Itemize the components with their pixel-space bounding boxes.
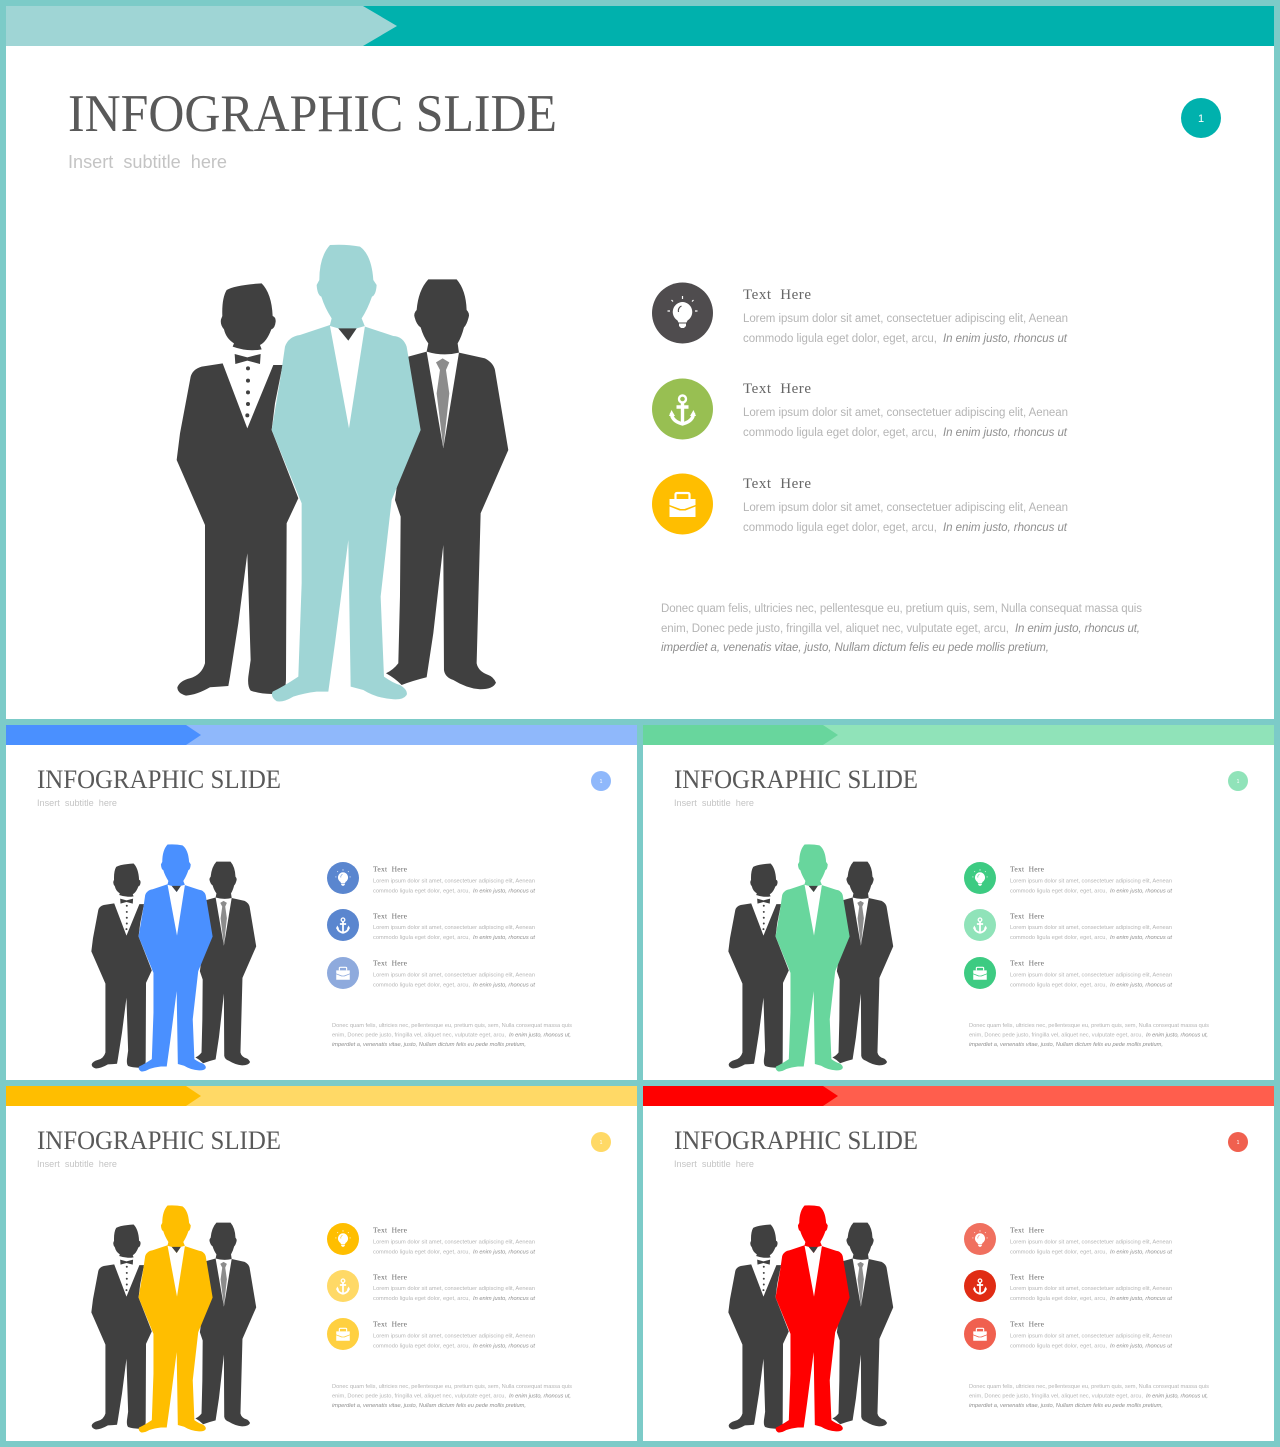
subtitle: Insert subtitle here bbox=[674, 798, 754, 808]
text block: item 3 bbox=[743, 476, 1068, 534]
page number badge: 1 bbox=[1237, 1140, 1240, 1146]
text block: item 2: Text Here bbox=[1010, 912, 1045, 920]
icon: anchor bbox=[964, 909, 996, 941]
text block: item 1: Text Here bbox=[1010, 1226, 1045, 1234]
page number badge: 1 bbox=[600, 779, 603, 785]
text block: item 3: In enim justo, rhoncus ut bbox=[473, 982, 535, 988]
illustration: three businessmen bbox=[728, 844, 893, 1071]
subtitle: Insert subtitle here bbox=[68, 152, 227, 172]
icon: light bulb bbox=[964, 862, 996, 894]
text block: item 1: In enim justo, rhoncus ut bbox=[1110, 1250, 1172, 1256]
text block: item 1: Lorem ipsum dolor sit amet, consectetuer adipiscing elit, Aenean bbox=[743, 313, 1068, 325]
text block: summary paragraph: imperdiet a, venenatis vitae, justo, Nullam dictum felis eu pede mollis pretium, bbox=[969, 1042, 1163, 1048]
header bar bbox=[6, 6, 1274, 46]
text block: item 1 bbox=[1010, 864, 1172, 894]
text block: summary paragraph bbox=[332, 1384, 572, 1409]
text block: item 1 bbox=[373, 864, 535, 894]
text block: item 1 bbox=[743, 287, 1068, 345]
text block: item 3: In enim justo, rhoncus ut bbox=[1110, 982, 1172, 988]
text block: item 2: Lorem ipsum dolor sit amet, consectetuer adipiscing elit, Aenean bbox=[373, 1286, 535, 1292]
text block: item 2: commodo ligula eget dolor, eget, arcu, bbox=[373, 1296, 470, 1302]
header bar bbox=[6, 725, 637, 745]
header arrow bbox=[6, 6, 397, 46]
icon: light bulb bbox=[964, 1223, 996, 1255]
title: INFOGRAPHIC SLIDE bbox=[674, 764, 918, 794]
panel: red slide bbox=[643, 1086, 1274, 1441]
text block: summary paragraph bbox=[332, 1023, 572, 1048]
page number badge bbox=[591, 1132, 611, 1152]
text block: item 3 bbox=[1010, 1320, 1172, 1350]
page number badge: 1 bbox=[1237, 779, 1240, 785]
page number badge bbox=[1181, 98, 1221, 138]
text block: item 3: Text Here bbox=[373, 958, 408, 968]
text block: item 1: Text Here bbox=[743, 287, 811, 303]
illustration: three businessmen bbox=[91, 1205, 256, 1432]
panel: green slide bbox=[643, 725, 1274, 1080]
header bar bbox=[643, 1086, 1274, 1106]
text block: item 3: Lorem ipsum dolor sit amet, consectetuer adipiscing elit, Aenean bbox=[373, 1334, 535, 1340]
illustration: three businessmen bbox=[728, 1205, 893, 1432]
text block: item 3: Text Here bbox=[373, 1320, 408, 1328]
header arrow bbox=[6, 725, 201, 745]
page number badge bbox=[591, 771, 611, 791]
title: INFOGRAPHIC SLIDE bbox=[674, 1125, 918, 1155]
text block: item 3: commodo ligula eget dolor, eget, arcu, bbox=[743, 522, 937, 534]
page number badge: 1 bbox=[600, 1140, 603, 1146]
text block: item 3: In enim justo, rhoncus ut bbox=[473, 1344, 535, 1350]
text block: summary paragraph: imperdiet a, venenatis vitae, justo, Nullam dictum felis eu pede mollis pretium, bbox=[332, 1042, 526, 1048]
title: INFOGRAPHIC SLIDE bbox=[68, 85, 557, 143]
text block: item 1 bbox=[1010, 1226, 1172, 1256]
text block: item 2: In enim justo, rhoncus ut bbox=[943, 427, 1068, 439]
text block: item 2: Lorem ipsum dolor sit amet, consectetuer adipiscing elit, Aenean bbox=[373, 925, 535, 931]
subtitle: Insert subtitle here bbox=[674, 1159, 754, 1169]
text block: item 1: Lorem ipsum dolor sit amet, consectetuer adipiscing elit, Aenean bbox=[373, 1240, 535, 1246]
text block: item 2: commodo ligula eget dolor, eget, arcu, bbox=[743, 427, 937, 439]
subtitle: Insert subtitle here bbox=[37, 1159, 117, 1169]
text block: item 2: Text Here bbox=[1010, 1272, 1045, 1282]
text block: item 3 bbox=[373, 1320, 535, 1350]
text block: item 3 bbox=[373, 958, 535, 988]
text block: summary paragraph: Donec quam felis, ultricies nec, pellentesque eu, pretium quis, sem, Nulla consequat massa quis bbox=[332, 1023, 572, 1029]
text block: item 3: Lorem ipsum dolor sit amet, consectetuer adipiscing elit, Aenean bbox=[1010, 972, 1172, 978]
text block: summary paragraph: In enim justo, rhoncus ut, bbox=[509, 1032, 571, 1038]
text block: summary paragraph: Donec quam felis, ultricies nec, pellentesque eu, pretium quis, sem, Nulla consequat massa quis bbox=[969, 1023, 1209, 1029]
icon: briefcase bbox=[964, 957, 996, 989]
text block: summary paragraph: In enim justo, rhoncus ut, bbox=[1146, 1394, 1208, 1400]
text block: item 1: In enim justo, rhoncus ut bbox=[473, 888, 535, 894]
text block: item 3: Lorem ipsum dolor sit amet, consectetuer adipiscing elit, Aenean bbox=[743, 502, 1068, 514]
text block: summary paragraph: In enim justo, rhoncus ut, bbox=[1146, 1032, 1208, 1038]
icon: briefcase bbox=[327, 1318, 359, 1350]
title: INFOGRAPHIC SLIDE bbox=[37, 764, 281, 794]
page number badge bbox=[1228, 771, 1248, 791]
text block: item 3: Lorem ipsum dolor sit amet, consectetuer adipiscing elit, Aenean bbox=[373, 972, 535, 978]
text block: item 1: Text Here bbox=[373, 1226, 408, 1234]
icon: anchor bbox=[964, 1270, 996, 1302]
icon: anchor bbox=[327, 909, 359, 941]
text block: summary paragraph: In enim justo, rhoncus ut, bbox=[1015, 623, 1140, 635]
text block: item 3: Text Here bbox=[1010, 958, 1045, 968]
text block: item 2: commodo ligula eget dolor, eget, arcu, bbox=[1010, 1296, 1107, 1302]
text block: item 3: commodo ligula eget dolor, eget, arcu, bbox=[1010, 982, 1107, 988]
page number badge bbox=[1228, 1132, 1248, 1152]
text block: item 1: In enim justo, rhoncus ut bbox=[473, 1250, 535, 1256]
text block: item 1: In enim justo, rhoncus ut bbox=[943, 333, 1068, 345]
panel: yellow slide bbox=[6, 1086, 637, 1441]
text block: summary paragraph: In enim justo, rhoncus ut, bbox=[509, 1394, 571, 1400]
panel: main slide bbox=[6, 6, 1274, 719]
text block: item 2: In enim justo, rhoncus ut bbox=[1110, 935, 1172, 941]
text block: summary paragraph: enim, Donec pede justo, fringilla vel, aliquet nec, vulputate eget, arcu, bbox=[332, 1032, 506, 1038]
text block: item 1: Text Here bbox=[373, 864, 408, 874]
text block: item 3: In enim justo, rhoncus ut bbox=[943, 522, 1068, 534]
text block: summary paragraph: Donec quam felis, ultricies nec, pellentesque eu, pretium quis, sem, Nulla consequat massa quis bbox=[332, 1384, 572, 1390]
text block: summary paragraph bbox=[969, 1384, 1209, 1409]
icon: light bulb bbox=[327, 1223, 359, 1255]
text block: item 2: In enim justo, rhoncus ut bbox=[1110, 1296, 1172, 1302]
text block: item 1: commodo ligula eget dolor, eget, arcu, bbox=[1010, 888, 1107, 894]
illustration: three businessmen bbox=[91, 844, 256, 1071]
text block: summary paragraph: Donec quam felis, ultricies nec, pellentesque eu, pretium quis, sem, Nulla consequat massa quis bbox=[969, 1384, 1209, 1390]
text block: item 1 bbox=[373, 1226, 535, 1256]
icon: briefcase bbox=[652, 474, 713, 534]
text block: item 3: In enim justo, rhoncus ut bbox=[1110, 1344, 1172, 1350]
text block: summary paragraph: imperdiet a, venenatis vitae, justo, Nullam dictum felis eu pede mollis pretium, bbox=[332, 1403, 526, 1409]
text block: summary paragraph bbox=[661, 603, 1142, 654]
text block: item 1: Lorem ipsum dolor sit amet, consectetuer adipiscing elit, Aenean bbox=[1010, 878, 1172, 884]
text block: item 2: In enim justo, rhoncus ut bbox=[473, 1296, 535, 1302]
text block: summary paragraph bbox=[969, 1023, 1209, 1048]
text block: item 2 bbox=[743, 381, 1068, 439]
text block: item 2: Text Here bbox=[373, 1272, 408, 1282]
icon: anchor bbox=[652, 378, 713, 440]
text block: item 2: Text Here bbox=[373, 912, 408, 920]
page number badge: 1 bbox=[1198, 113, 1204, 125]
illustration: three businessmen bbox=[177, 245, 508, 702]
text block: summary paragraph: enim, Donec pede justo, fringilla vel, aliquet nec, vulputate eget, arcu, bbox=[969, 1394, 1143, 1400]
header arrow bbox=[643, 1086, 838, 1106]
subtitle: Insert subtitle here bbox=[37, 798, 117, 808]
text block: item 1: commodo ligula eget dolor, eget, arcu, bbox=[1010, 1250, 1107, 1256]
text block: summary paragraph: enim, Donec pede justo, fringilla vel, aliquet nec, vulputate eget, arcu, bbox=[332, 1394, 506, 1400]
text block: item 2: commodo ligula eget dolor, eget, arcu, bbox=[1010, 935, 1107, 941]
text block: item 2 bbox=[373, 912, 535, 941]
header arrow bbox=[6, 1086, 201, 1106]
text block: item 3: commodo ligula eget dolor, eget, arcu, bbox=[373, 982, 470, 988]
icon: light bulb bbox=[327, 862, 359, 894]
text block: summary paragraph: enim, Donec pede justo, fringilla vel, aliquet nec, vulputate eget, arcu, bbox=[661, 623, 1009, 635]
title: INFOGRAPHIC SLIDE bbox=[37, 1125, 281, 1155]
text block: item 2 bbox=[1010, 1272, 1172, 1302]
text block: item 2: commodo ligula eget dolor, eget, arcu, bbox=[373, 935, 470, 941]
header bar bbox=[6, 1086, 637, 1106]
text block: item 3: Lorem ipsum dolor sit amet, consectetuer adipiscing elit, Aenean bbox=[1010, 1334, 1172, 1340]
text block: item 3 bbox=[1010, 958, 1172, 988]
text block: item 1: In enim justo, rhoncus ut bbox=[1110, 888, 1172, 894]
text block: item 3: Text Here bbox=[1010, 1320, 1045, 1328]
icon: light bulb bbox=[652, 282, 713, 344]
icon: briefcase bbox=[327, 957, 359, 989]
text block: summary paragraph: Donec quam felis, ultricies nec, pellentesque eu, pretium quis, sem, Nulla consequat massa quis bbox=[661, 603, 1142, 615]
text block: summary paragraph: imperdiet a, venenatis vitae, justo, Nullam dictum felis eu pede mollis pretium, bbox=[969, 1403, 1163, 1409]
text block: item 2 bbox=[373, 1272, 535, 1302]
text block: summary paragraph: enim, Donec pede justo, fringilla vel, aliquet nec, vulputate eget, arcu, bbox=[969, 1032, 1143, 1038]
text block: item 1: Lorem ipsum dolor sit amet, consectetuer adipiscing elit, Aenean bbox=[373, 878, 535, 884]
text block: item 1: commodo ligula eget dolor, eget, arcu, bbox=[373, 888, 470, 894]
text block: item 2: Text Here bbox=[743, 381, 811, 397]
text block: item 2 bbox=[1010, 912, 1172, 941]
panel: blue slide bbox=[6, 725, 637, 1080]
text block: item 3: Text Here bbox=[743, 476, 811, 492]
text block: item 2: Lorem ipsum dolor sit amet, consectetuer adipiscing elit, Aenean bbox=[1010, 1286, 1172, 1292]
header bar bbox=[643, 725, 1274, 745]
text block: item 2: In enim justo, rhoncus ut bbox=[473, 935, 535, 941]
header arrow bbox=[643, 725, 838, 745]
text block: item 1: commodo ligula eget dolor, eget, arcu, bbox=[373, 1250, 470, 1256]
text block: item 3: commodo ligula eget dolor, eget, arcu, bbox=[373, 1344, 470, 1350]
text block: summary paragraph: imperdiet a, venenatis vitae, justo, Nullam dictum felis eu pede mollis pretium, bbox=[661, 642, 1049, 654]
text block: item 2: Lorem ipsum dolor sit amet, consectetuer adipiscing elit, Aenean bbox=[743, 407, 1068, 419]
text block: item 1: Lorem ipsum dolor sit amet, consectetuer adipiscing elit, Aenean bbox=[1010, 1240, 1172, 1246]
text block: item 1: Text Here bbox=[1010, 864, 1045, 874]
icon: briefcase bbox=[964, 1318, 996, 1350]
icon: anchor bbox=[327, 1270, 359, 1302]
text block: item 1: commodo ligula eget dolor, eget, arcu, bbox=[743, 333, 937, 345]
text block: item 2: Lorem ipsum dolor sit amet, consectetuer adipiscing elit, Aenean bbox=[1010, 925, 1172, 931]
text block: item 3: commodo ligula eget dolor, eget, arcu, bbox=[1010, 1344, 1107, 1350]
